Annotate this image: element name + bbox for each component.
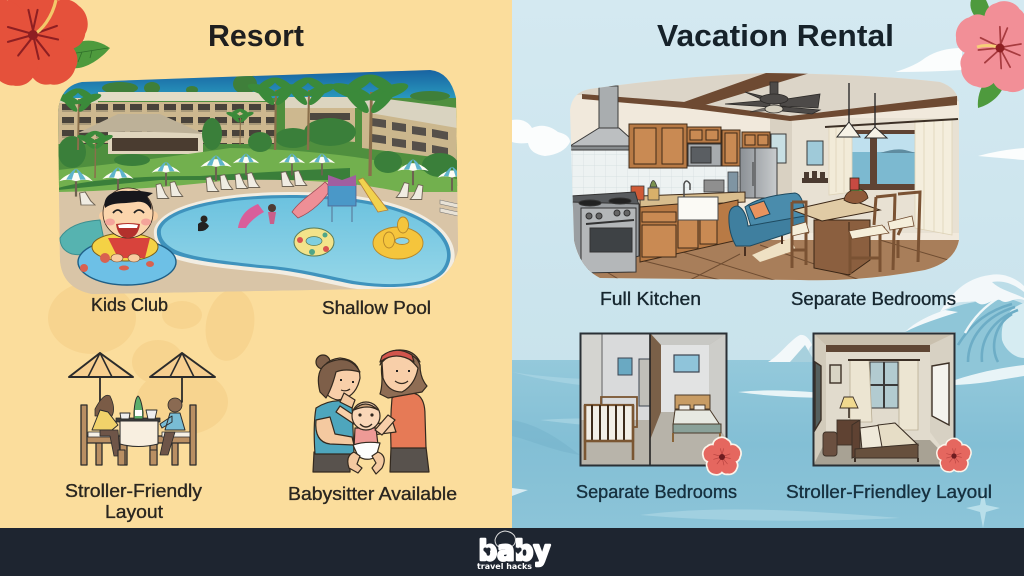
bed [852,420,918,462]
fruit bowl and vase [844,178,868,204]
label: Babysitter Available: Babysitter Available [288,484,457,504]
title: Resort: Resort [208,18,304,53]
stove and oven [570,192,639,273]
label: Stroller-Friendly Layout [65,481,202,522]
counter and lower cabinets [640,192,745,262]
icon: small hibiscus one [701,438,743,477]
upper cabinets [629,124,770,168]
far right loungers [440,200,458,216]
decoration: clouds [512,48,1024,160]
pendant lights [837,83,887,138]
frame: room one [580,334,726,466]
background: ocean wave [512,274,1024,528]
artwork [771,134,823,165]
sun loungers [80,171,423,205]
microwave [688,144,721,166]
pool [154,192,455,291]
window with sea view [852,130,916,190]
icon: red hibiscus top left [0,0,110,96]
illustration: resort pool scene [58,70,458,294]
bed [673,395,721,442]
sun umbrellas [59,153,466,197]
sea and sky [60,70,456,100]
label: Full Kitchen: Full Kitchen [600,289,701,309]
curtains [850,360,918,430]
ceiling [577,73,958,116]
crib [585,397,637,460]
palm trees [54,71,410,178]
label: Separate Bedrooms bottom: Separate Bedrooms [576,482,737,502]
refrigerator [740,148,777,198]
rainbow pool ring [294,228,334,256]
water slide [292,175,388,222]
label: Kids Club: Kids Club [91,295,168,315]
backsplash [570,150,740,196]
dining chairs [792,192,920,274]
ceiling beams [582,73,957,121]
partition [649,333,651,466]
window [870,362,898,408]
blue sofa [729,193,805,256]
main hotel building [58,92,276,144]
panel: resort background [0,0,512,528]
label: Stroller-Friendley Layoul: Stroller-Friendley Layoul [786,482,992,502]
pavilion [78,114,204,154]
title: Vacation Rental: Vacation Rental [657,18,894,53]
swimmers [198,204,276,231]
lawn [58,148,460,192]
background: paw print [48,282,260,435]
ceiling fan [725,82,820,114]
illustration: vacation rental kitchen scene [570,73,959,280]
illustration: stroller friendly bedroom [813,333,955,466]
logo: baby travel hacks: travel hacks [477,562,533,571]
bushes [58,118,458,190]
kitchen island [792,198,880,275]
nursery picture and door [618,358,650,406]
countertop items [631,172,738,200]
yellow pool ring [373,217,423,259]
deck [50,180,460,300]
illustration: separate bedrooms rooms [580,333,727,466]
shelf [802,171,828,183]
icon: pink hibiscus top right [941,0,1024,108]
right hotel wing [285,96,457,160]
panel: vacation rental background [512,0,1024,528]
illustration: laughing child in swim ring [60,188,176,285]
rug [752,238,796,262]
farmhouse sink and faucet [678,181,718,220]
logo: baby travel hacks: baby [478,534,550,567]
floor [574,240,959,280]
right wall [790,118,960,233]
footer bar [0,528,1024,576]
greenery [50,74,470,186]
label: Shallow Pool: Shallow Pool [322,298,431,318]
curtains [829,120,952,235]
floor [813,440,955,466]
frame: room two [814,334,954,466]
framed picture [674,355,699,372]
second bedroom wall [650,333,727,466]
icon: outdoor dining table with umbrellas [69,353,215,465]
label: Stroller-Friendly Layout: Layout [105,502,163,522]
label: Stroller-Friendly Layout: Stroller-Friendly [65,481,202,501]
wall art and mirror [815,362,949,430]
icon: small hibiscus two [936,439,972,474]
label: Separate Bedrooms top: Separate Bedrooms [791,289,956,309]
table lamp and nightstand [823,397,859,456]
icon: babysitters holding a baby [313,350,429,474]
range hood [571,86,628,150]
